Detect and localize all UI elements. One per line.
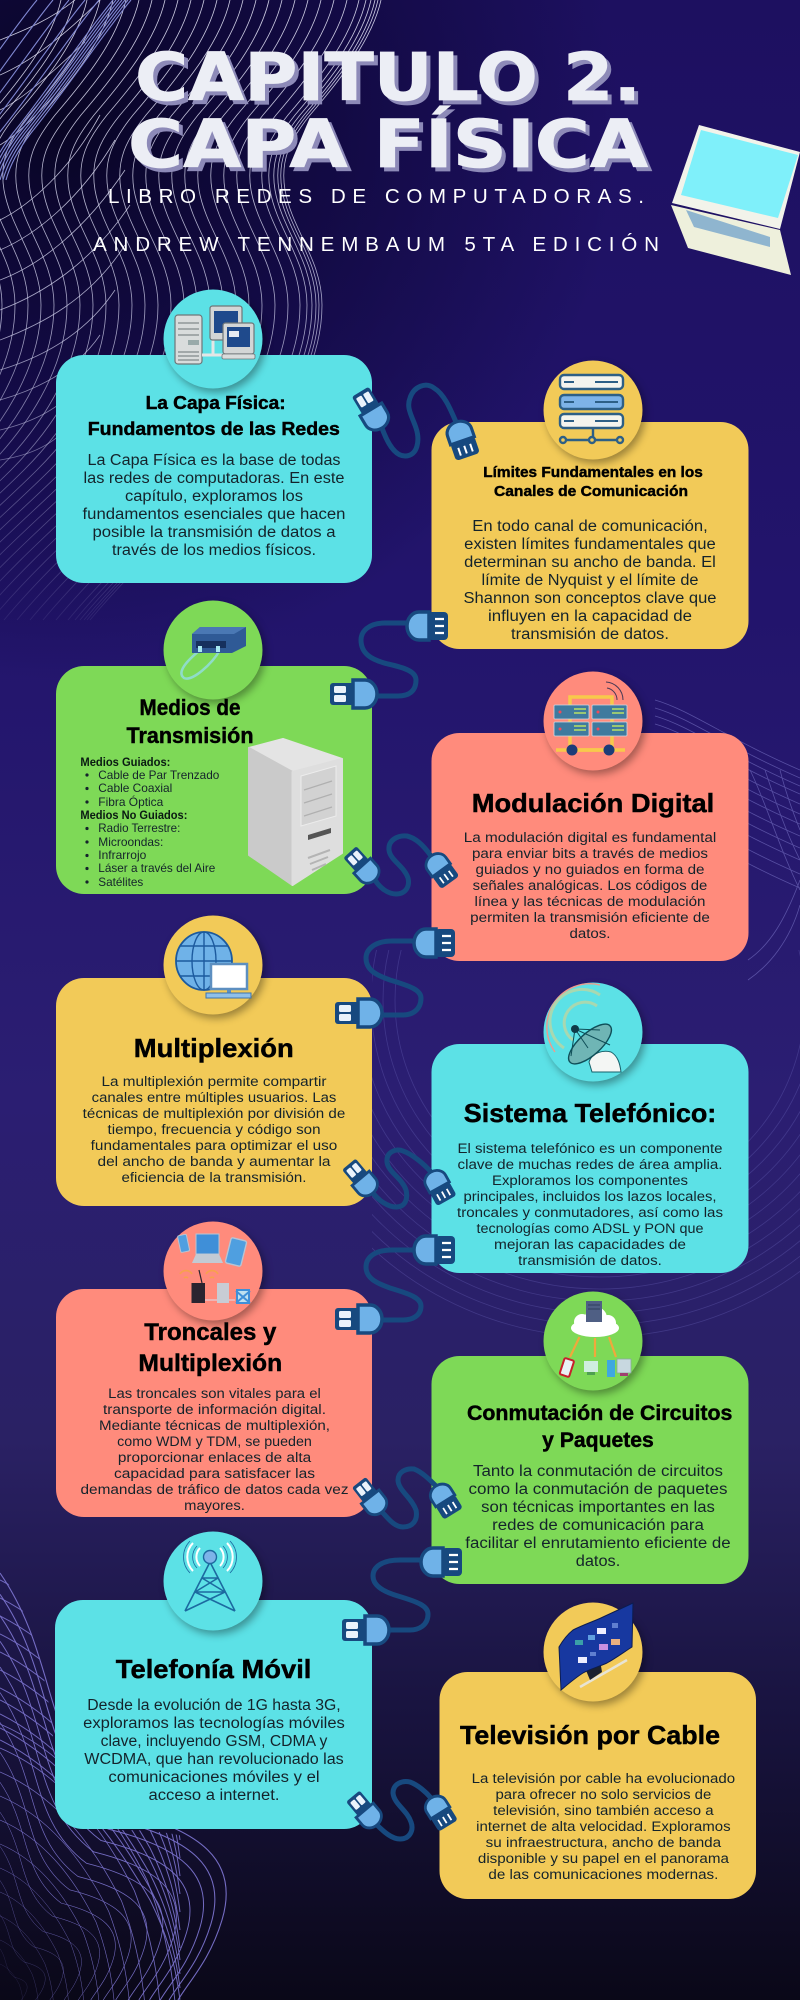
body text: transmisión de datos. (518, 1253, 662, 1269)
heading: Límites Fundamentales en los (483, 464, 703, 481)
body text: troncales y conmutadores, así como las (457, 1205, 723, 1221)
heading (483, 464, 703, 500)
body text: clave de muchas redes de área amplia. (458, 1157, 722, 1173)
body text: tiempo, frecuencia y código son (108, 1122, 320, 1138)
list: medios guiados y no guiados: Radio Terrestre: (98, 822, 180, 835)
icon: network equipment (544, 672, 642, 770)
body text: Desde la evolución de 1G hasta 3G, (87, 1697, 341, 1714)
background line pattern: bottom left (0, 1573, 226, 2000)
body text (457, 1141, 723, 1269)
body text: datos. (570, 926, 610, 942)
panel: Medios de Transmisión (56, 600, 372, 894)
list: medios guiados y no guiados: Satélites (98, 876, 144, 889)
body text: eficiencia de la transmisión. (122, 1170, 306, 1186)
title (128, 39, 648, 183)
panel: La Capa Física (56, 290, 372, 583)
list: medios guiados y no guiados: Cable de Par Trenzado (98, 769, 219, 782)
heading: Telefonía Móvil (116, 1654, 311, 1684)
body text: límite de Nyquist y el límite de (482, 572, 698, 589)
icon: laptop (671, 125, 800, 275)
panel: Sistema Telefónico (432, 982, 748, 1273)
body text: son técnicas importantes en las (481, 1499, 715, 1516)
background line pattern: bright band (0, 0, 131, 180)
body text: exploramos las tecnologías móviles (83, 1715, 345, 1732)
body text: de las comunicaciones modernas. (488, 1867, 718, 1883)
connector cable 3 (342, 836, 459, 894)
body text: para enviar bits a través de medios (472, 846, 708, 862)
icon: computer tower (249, 739, 342, 885)
heading: Modulación Digital (472, 788, 714, 818)
heading (126, 695, 254, 748)
body text: capítulo, exploramos los (125, 488, 303, 505)
body text: El sistema telefónico es un componente (458, 1141, 723, 1157)
heading: Conmutación de Circuitos (467, 1402, 732, 1425)
heading: Troncales y (144, 1319, 277, 1346)
icon: cloud server with devices (544, 1292, 642, 1390)
body text (472, 1771, 735, 1883)
body text: Tanto la conmutación de circuitos (473, 1463, 723, 1480)
body text: Exploramos los componentes (492, 1173, 688, 1189)
heading: Transmisión (126, 723, 254, 748)
body text: La multiplexión permite compartir (102, 1074, 327, 1090)
heading: La Capa Física: (146, 393, 286, 413)
body text: demandas de tráfico de datos cada vez (80, 1482, 348, 1498)
body text: La modulación digital es fundamental (464, 830, 716, 846)
body text: técnicas de multiplexión por división de (83, 1106, 345, 1122)
heading: Canales de Comunicación (494, 483, 688, 500)
body text: canales entre múltiples usuarios. Las (92, 1090, 336, 1106)
subtitle: ANDREW TENNEMBAUM 5TA EDICIÓN (93, 233, 659, 256)
connector cable 7 (350, 1469, 463, 1527)
heading: Televisión por Cable (460, 1720, 720, 1750)
body text: existen límites fundamentales que (464, 536, 716, 553)
connector cable 2 (330, 612, 448, 708)
body text: comunicaciones móviles y el (108, 1769, 320, 1786)
body text: tecnologías como ADSL y PON que (476, 1221, 704, 1237)
body text: influyen en la capacidad de (488, 608, 692, 625)
list: medios guiados y no guiados: Medios Guiados: (80, 756, 170, 769)
body text: posible la transmisión de datos a (92, 524, 336, 541)
icon: curved television (544, 1602, 642, 1702)
body text: mayores. (184, 1498, 245, 1514)
background line pattern: top left (0, 0, 381, 620)
body text: fundamentos esenciales que hacen (82, 506, 346, 523)
list: medios guiados y no guiados: Medios No Guiados: (80, 809, 187, 822)
body text: línea y las técnicas de modulación (474, 894, 706, 910)
connector cable 1 (349, 385, 480, 461)
body text: transporte de información digital. (103, 1402, 326, 1418)
heading: Multiplexión (138, 1350, 282, 1377)
icon: server rack (544, 360, 642, 460)
connector cable 5 (340, 1150, 457, 1207)
body text: La televisión por cable ha evolucionado (472, 1771, 735, 1787)
list: medios guiados y no guiados: Cable Coaxial (98, 782, 172, 795)
body text: clave, incluyendo GSM, CDMA y (101, 1733, 328, 1750)
body text: determinan su ancho de banda. El (464, 554, 716, 571)
icon: antenna tower (164, 1532, 262, 1630)
body text (83, 1074, 345, 1186)
body text: través de los medios físicos. (112, 542, 316, 559)
body text: las redes de computadoras. En este (84, 470, 344, 487)
icon: server and computers (164, 290, 262, 388)
body text: señales analógicas. Los códigos de (473, 878, 707, 894)
body text (83, 1697, 345, 1804)
panel: Troncales y Multiplexión (56, 1222, 372, 1517)
heading: Fundamentos de las Redes (88, 419, 340, 439)
body text: transmisión de datos. (511, 626, 669, 643)
body text: capacidad para satisfacer las (114, 1466, 315, 1482)
title: CAPA FÍSICA (128, 105, 648, 183)
connector cable 9 (344, 1781, 458, 1839)
body text (464, 830, 716, 942)
body text: como WDM y TDM, se pueden (117, 1434, 312, 1450)
body text: fundamentales para optimizar el uso (91, 1138, 337, 1154)
body text: guiados y no guiados en forma de (476, 862, 705, 878)
list: medios guiados y no guiados: Microondas: (98, 836, 163, 849)
connector cable 8 (342, 1548, 462, 1644)
subtitle: LIBRO REDES DE COMPUTADORAS. (108, 185, 644, 208)
body text: proporcionar enlaces de alta (118, 1450, 311, 1466)
icon: globe and computer (164, 916, 262, 1014)
heading (467, 1402, 732, 1452)
body text: Shannon son conceptos clave que (464, 590, 716, 607)
body text: para ofrecer no solo servicios de (496, 1787, 711, 1803)
body text: principales, incluidos los lazos locales, (464, 1189, 716, 1205)
panel: Límites Fundamentales (432, 360, 748, 649)
body text: facilitar el enrutamiento eficiente de (465, 1535, 731, 1552)
body text (465, 1463, 731, 1570)
subtitle (93, 185, 659, 256)
body text: mejoran las capacidades de (494, 1237, 686, 1253)
connector cable 6 (335, 1236, 455, 1333)
body text: Las troncales son vitales para el (108, 1386, 321, 1402)
background concentric arcs (372, 950, 800, 1335)
heading: y Paquetes (542, 1429, 654, 1452)
body text: WCDMA, que han revolucionado las (84, 1751, 344, 1768)
body text: como la conmutación de paquetes (468, 1481, 728, 1498)
body text: permiten la transmisión eficiente de (470, 910, 710, 926)
body text (80, 1386, 348, 1514)
panel: Conmutación de Circuitos y Paquetes (432, 1292, 748, 1584)
body text (82, 452, 346, 559)
icon: satellite dish (544, 982, 642, 1082)
heading (88, 393, 340, 439)
background line pattern: right side (655, 700, 800, 980)
heading (138, 1319, 282, 1377)
title: CAPITULO 2. (135, 39, 641, 116)
list: medios guiados y no guiados: Láser a través del Aire (98, 862, 215, 875)
list: medios guiados y no guiados: Infrarrojo (98, 849, 146, 862)
body text: En todo canal de comunicación, (472, 518, 708, 535)
panel: Telefonía Móvil (55, 1532, 372, 1829)
body text: acceso a internet. (149, 1787, 279, 1804)
body text: La Capa Física es la base de todas (88, 452, 341, 469)
body text: Mediante técnicas de multiplexión, (99, 1418, 330, 1434)
panel: Multiplexión (56, 916, 372, 1206)
body text: datos. (576, 1553, 620, 1570)
panel: Modulación Digital (432, 672, 748, 961)
body text: internet de alta velocidad. Exploramos (476, 1819, 731, 1835)
connector cable 4 (335, 929, 455, 1027)
panel: Televisión por Cable (440, 1602, 756, 1899)
body text (464, 518, 716, 643)
list: medios guiados y no guiados (80, 756, 219, 889)
list: medios guiados y no guiados: Fibra Óptica (98, 796, 164, 809)
body text: su infraestructura, ancho de banda (486, 1835, 721, 1851)
icon: devices and router (164, 1222, 262, 1320)
body text: disponible y su papel en el panorama (478, 1851, 729, 1867)
heading: Sistema Telefónico: (464, 1098, 716, 1128)
heading: Medios de (140, 695, 240, 720)
heading: Multiplexión (134, 1033, 294, 1063)
icon: network switch with fibre (164, 600, 262, 700)
body text: redes de comunicación para (492, 1517, 704, 1534)
body text: del ancho de banda y aumentar la (98, 1154, 331, 1170)
body text: televisión, sino también acceso a (493, 1803, 714, 1819)
